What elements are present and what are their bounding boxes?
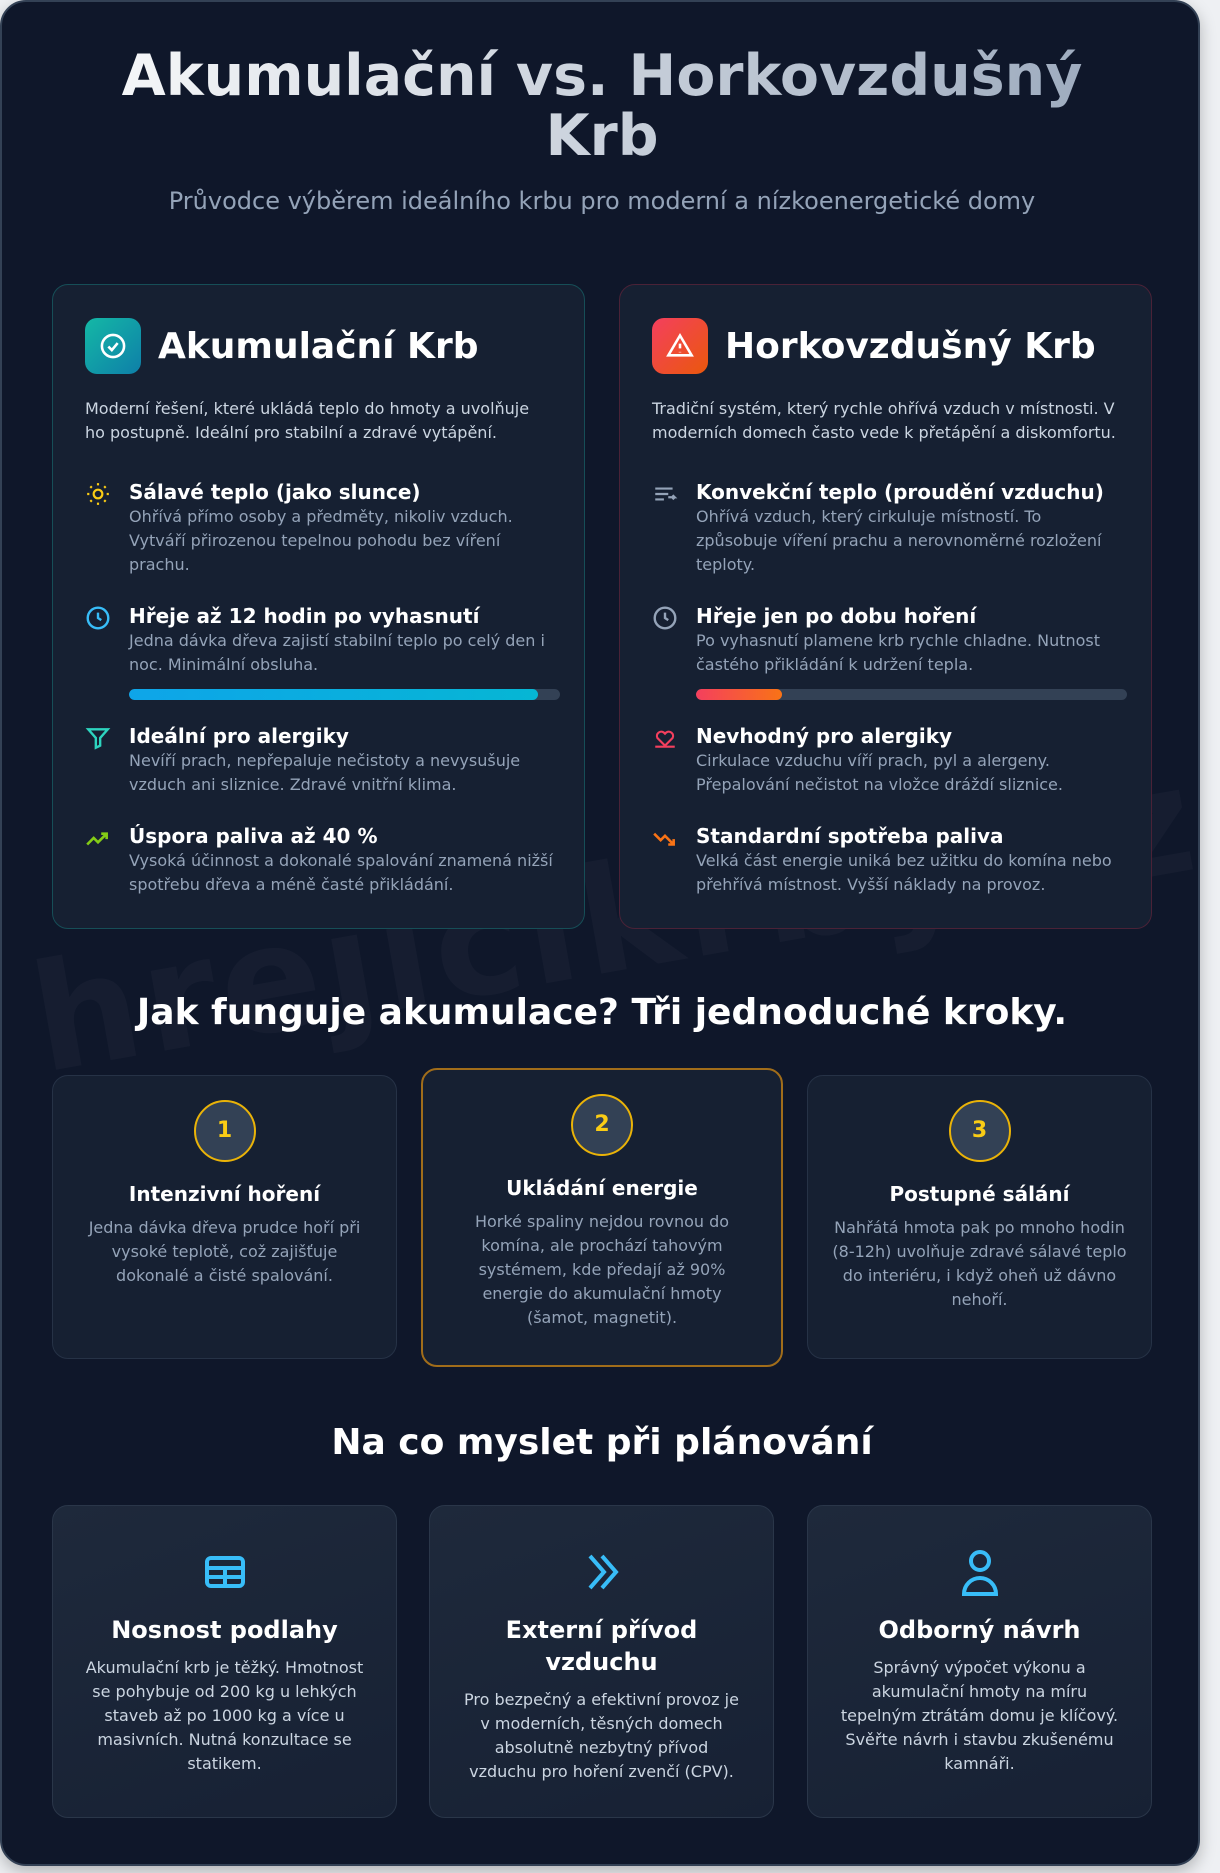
panel heading: [652, 318, 1096, 374]
description: Moderní řešení, které ukládá teplo do hmoty a uvolňuje ho postupně. Ideální pro stabilní a zdravé vytápění.: [85, 399, 529, 442]
panel: akumulační krb: [52, 284, 585, 929]
title: [2, 46, 1202, 166]
heading: steps: Jak funguje akumulace? Tři jednoduché kroky.: [137, 992, 1067, 1033]
panel heading: Akumulační Krb: [158, 326, 478, 366]
title: Krb: [545, 103, 659, 169]
item: úspora: Vysoká účinnost a dokonalé spalování znamená nižší spotřebu dřeva a méně časté přikládání.: [129, 851, 553, 894]
item: 12 hodin: Hřeje až 12 hodin po vyhasnutí: [129, 604, 479, 628]
card: nosnost: Akumulační krb je těžký. Hmotnost se pohybuje od 200 kg u lehkých staveb až po 1000 kg a více u masivních. Nutná konzultace se statikem.: [86, 1658, 363, 1773]
item: konvekční: [655, 480, 1104, 574]
card: odborný návrh: Odborný návrh: [878, 1616, 1081, 1644]
item: sálavé teplo: [87, 480, 513, 574]
item: alergici: [86, 724, 520, 794]
card: externí přívod: Externí přívod vzduchu: [506, 1616, 697, 1676]
card: externí přívod: Pro bezpečný a efektivní provoz je v moderních, těsných domech absolutně nezbytný přívod vzduchu pro hoření zvenčí (CPV).: [464, 1690, 739, 1781]
step 2: Horké spaliny nejdou rovnou do komína, ale prochází tahovým systémem, kde předají až 90% energie do akumulační hmoty (šamot, magnetit).: [475, 1212, 729, 1327]
item: doba hoření: [654, 604, 1127, 700]
description: Tradiční systém, který rychle ohřívá vzduch v místnosti. V moderních domech často vede k přetápění a diskomfortu.: [652, 399, 1116, 442]
heading: planning: Na co myslet při plánování: [331, 1422, 873, 1463]
item: sálavé teplo: Sálavé teplo (jako slunce): [129, 480, 421, 504]
panel heading: Horkovzdušný Krb: [725, 326, 1096, 366]
card: odborný návrh: [807, 1505, 1152, 1818]
step 2: [421, 1068, 783, 1367]
step 3: [807, 1075, 1152, 1359]
item: spotřeba: [653, 824, 1112, 894]
card: nosnost: [52, 1505, 397, 1818]
card: externí přívod: [429, 1505, 774, 1818]
main card: hrejicikrby.cz: [20, 732, 1200, 1106]
item: nevhodný: [655, 724, 1063, 794]
step 3: 3: [972, 1118, 987, 1143]
item: nevhodný: Nevhodný pro alergiky: [696, 724, 952, 748]
step 1: [52, 1075, 397, 1359]
item: sálavé teplo: Ohřívá přímo osoby a předměty, nikoliv vzduch. Vytváří přirozenou tepelnou pohodu bez víření prachu.: [129, 507, 513, 574]
step 1: Intenzivní hoření: [129, 1182, 320, 1206]
step 3: Nahřátá hmota pak po mnoho hodin (8-12h) uvolňuje zdravé sálavé teplo do interiéru, i když oheň už dávno nehoří.: [832, 1218, 1127, 1309]
step 1: 1: [217, 1118, 232, 1143]
subtitle: Průvodce výběrem ideálního krbu pro moderní a nízkoenergetické domy: [169, 187, 1035, 215]
item: spotřeba: Velká část energie uniká bez užitku do komína nebo přehřívá místnost. Vyšší náklady na provoz.: [696, 851, 1112, 894]
step 1: Jedna dávka dřeva prudce hoří při vysoké teplotě, což zajišťuje dokonalé a čisté spalování.: [89, 1218, 360, 1285]
item: 12 hodin: Jedna dávka dřeva zajistí stabilní teplo po celý den i noc. Minimální obsluha.: [129, 631, 545, 674]
item: konvekční: Ohřívá vzduch, který cirkuluje místností. To způsobuje víření prachu a nerovnoměrné rozložení teploty.: [696, 507, 1101, 574]
panel: horkovzdušný krb: [619, 284, 1152, 929]
item: konvekční: Konvekční teplo (proudění vzduchu): [696, 480, 1104, 504]
item: alergici: Ideální pro alergiky: [129, 724, 349, 748]
step 3: Postupné sálání: [889, 1182, 1070, 1206]
item: nevhodný: Cirkulace vzduchu víří prach, pyl a alergeny. Přepalování nečistot na vložce dráždí sliznice.: [696, 751, 1063, 794]
item: alergici: Nevíří prach, nepřepaluje nečistoty a nevysušuje vzduch ani sliznice. Zdravé vnitřní klima.: [129, 751, 520, 794]
card: nosnost: Nosnost podlahy: [111, 1616, 338, 1644]
item: úspora: Úspora paliva až 40 %: [129, 824, 377, 848]
item: doba hoření: Po vyhasnutí plamene krb rychle chladne. Nutnost častého přikládání k udržení tepla.: [696, 631, 1100, 674]
title: Akumulační vs. Horkovzdušný: [122, 43, 1082, 109]
card: odborný návrh: Správný výpočet výkonu a akumulační hmoty na míru tepelným ztrátám domu je klíčový. Svěřte návrh i stavbu zkušenému kamnáři.: [841, 1658, 1118, 1773]
item: doba hoření: Hřeje jen po dobu hoření: [696, 604, 976, 628]
step 2: Ukládání energie: [506, 1176, 698, 1200]
panel heading: [85, 318, 478, 374]
step 2: 2: [594, 1112, 610, 1137]
item: úspora: [86, 824, 554, 894]
item: 12 hodin: [86, 604, 560, 700]
item: spotřeba: Standardní spotřeba paliva: [696, 824, 1004, 848]
